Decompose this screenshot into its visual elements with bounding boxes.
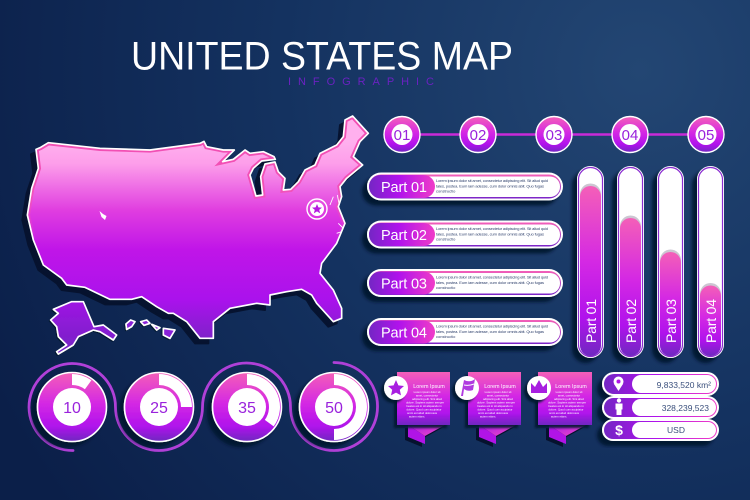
step 04 xyxy=(612,116,648,152)
card: star: dolore. Sapiens autem semper xyxy=(406,400,444,404)
step 03 xyxy=(536,116,572,152)
connector line xyxy=(402,133,706,136)
card: star: dolore. Quod cum accipiatur xyxy=(407,408,442,412)
mainland xyxy=(22,116,368,343)
lake detail xyxy=(100,211,106,220)
bar: Part 04: Part 04 xyxy=(703,299,719,343)
part rows xyxy=(367,172,563,346)
card: flag: autem etiam. xyxy=(480,414,496,418)
card: flag: amet, consectetur xyxy=(487,394,509,398)
Hawaii xyxy=(126,320,175,338)
card: flag: dolore. Sapiens autem semper xyxy=(477,400,515,404)
row: Part 04 xyxy=(367,318,563,346)
gauge 10: 10 xyxy=(63,400,81,417)
bar: Part 03: Part 03 xyxy=(663,299,679,343)
step 02: 02 xyxy=(470,127,486,144)
map of the United States xyxy=(22,116,368,354)
row: Part 02: constructio xyxy=(436,236,456,242)
row: Part 01: tales, postea. Eum iam adesse, cum dolor omnis abit. Quo fugas xyxy=(436,184,544,188)
fact: population: 328,239,523 xyxy=(662,403,709,413)
step 05 xyxy=(688,116,724,152)
row: Part 02 xyxy=(367,220,563,248)
bar: Part 02: Part 02 xyxy=(623,299,639,343)
bar: Part 03 xyxy=(657,166,684,358)
row: Part 04: constructio xyxy=(436,334,456,339)
row: Part 01: constructio xyxy=(436,188,456,194)
wavy ribbon line xyxy=(29,362,378,451)
card: crown: Lorem Ipsum xyxy=(555,384,587,390)
card: crown: omni est aliud dolorosus xyxy=(549,411,580,415)
card: crown: adipiscing elit. Sint aliud xyxy=(554,397,584,401)
row: Part 03: constructio xyxy=(436,285,456,290)
card: star: adipiscing elit. Sint aliud xyxy=(412,397,442,401)
card: flag: beatus est in sit aliquando in xyxy=(477,404,513,408)
card: crown: amet, consectetur xyxy=(558,394,580,398)
card: star: Lorem Ipsum xyxy=(413,384,445,390)
fact: currency: $ xyxy=(615,422,623,438)
gauge 25: 25 xyxy=(150,400,168,417)
card: star: autem etiam. xyxy=(409,414,425,418)
row: Part 04: tales, postea. Eum iam adesse, cum dolor omnis abit. Quo fugas xyxy=(436,329,544,334)
bar: Part 04 xyxy=(697,166,724,358)
step 01: 01 xyxy=(394,127,410,144)
bar: Part 01: Part 01 xyxy=(583,299,599,343)
fact: currency xyxy=(602,419,719,441)
step 04: 04 xyxy=(622,127,638,144)
row: Part 01: Part 01 xyxy=(381,180,427,196)
step 05: 05 xyxy=(698,127,714,144)
bar: Part 02 xyxy=(617,166,644,358)
row: Part 01 xyxy=(367,172,563,200)
card: crown: beatus est in sit aliquando in xyxy=(548,404,584,408)
card: flag: adipiscing elit. Sint aliud xyxy=(483,397,513,401)
vertical bar chart xyxy=(577,166,724,358)
gauge 50: 50 xyxy=(325,400,343,417)
card: crown: dolore. Sapiens autem semper xyxy=(548,400,586,404)
key facts xyxy=(602,372,719,441)
fact: currency: USD xyxy=(667,425,685,435)
card: crown xyxy=(527,372,592,447)
row: Part 01: Lorem ipsum dolor sit amet, consectetur adipiscing elit. Sit aliud quid xyxy=(436,178,548,183)
gauge 50 xyxy=(300,372,368,442)
step 02 xyxy=(460,116,496,152)
ribbon cards xyxy=(384,372,592,447)
card: flag: Lorem ipsum dolor sit xyxy=(485,390,512,394)
Alaska xyxy=(51,302,117,354)
gauge 25 xyxy=(124,372,194,442)
row: Part 03 xyxy=(367,269,563,297)
row: Part 03: Lorem ipsum dolor sit amet, consectetur adipiscing elit. Sit aliud quid xyxy=(436,274,548,280)
step 03: 03 xyxy=(546,127,562,144)
row: Part 04: Lorem ipsum dolor sit amet, consectetur adipiscing elit. Sit aliud quid xyxy=(436,324,548,328)
numbered timeline xyxy=(384,116,724,152)
card: flag: omni est aliud dolorosus xyxy=(478,411,509,415)
bar: Part 01 xyxy=(577,166,604,358)
card: crown: Lorem ipsum dolor sit xyxy=(556,390,583,394)
card: star: amet, consectetur xyxy=(416,394,438,398)
title: UNITED STATES MAP xyxy=(131,34,513,78)
card: crown: autem etiam. xyxy=(551,414,567,418)
row: Part 02: Lorem ipsum dolor sit amet, consectetur adipiscing elit. Sit aliud quid xyxy=(436,226,548,231)
gauge 10 xyxy=(38,372,106,442)
donut gauges xyxy=(29,362,378,451)
row: Part 03: Part 03 xyxy=(381,276,427,292)
row: Part 02: tales, postea. Eum iam adesse, cum dolor omnis abit. Quo fugas xyxy=(436,232,544,236)
card: crown: dolore. Quod cum accipiatur xyxy=(549,408,584,412)
row: Part 02: Part 02 xyxy=(381,228,427,244)
subtitle: INFOGRAPHIC xyxy=(288,76,434,88)
fact: area: 9,833,520 km² xyxy=(657,380,711,390)
row: Part 03: tales, postea. Eum iam adesse, cum dolor omnis abit. Quo fugas xyxy=(436,280,544,285)
card: star xyxy=(384,372,450,447)
gauge 35 xyxy=(212,372,282,442)
card: flag: Lorem Ipsum xyxy=(484,384,516,390)
card: star: omni est aliud dolorosus xyxy=(407,411,438,415)
card: flag: dolore. Quod cum accipiatur xyxy=(478,408,513,412)
card: star: beatus est in sit aliquando in xyxy=(406,404,442,408)
card: flag xyxy=(455,372,521,447)
step 01 xyxy=(384,116,420,152)
gauge 35: 35 xyxy=(238,400,256,417)
capital star marker xyxy=(307,199,327,219)
row: Part 04: Part 04 xyxy=(381,326,427,342)
card: star: Lorem ipsum dolor sit xyxy=(414,390,441,394)
